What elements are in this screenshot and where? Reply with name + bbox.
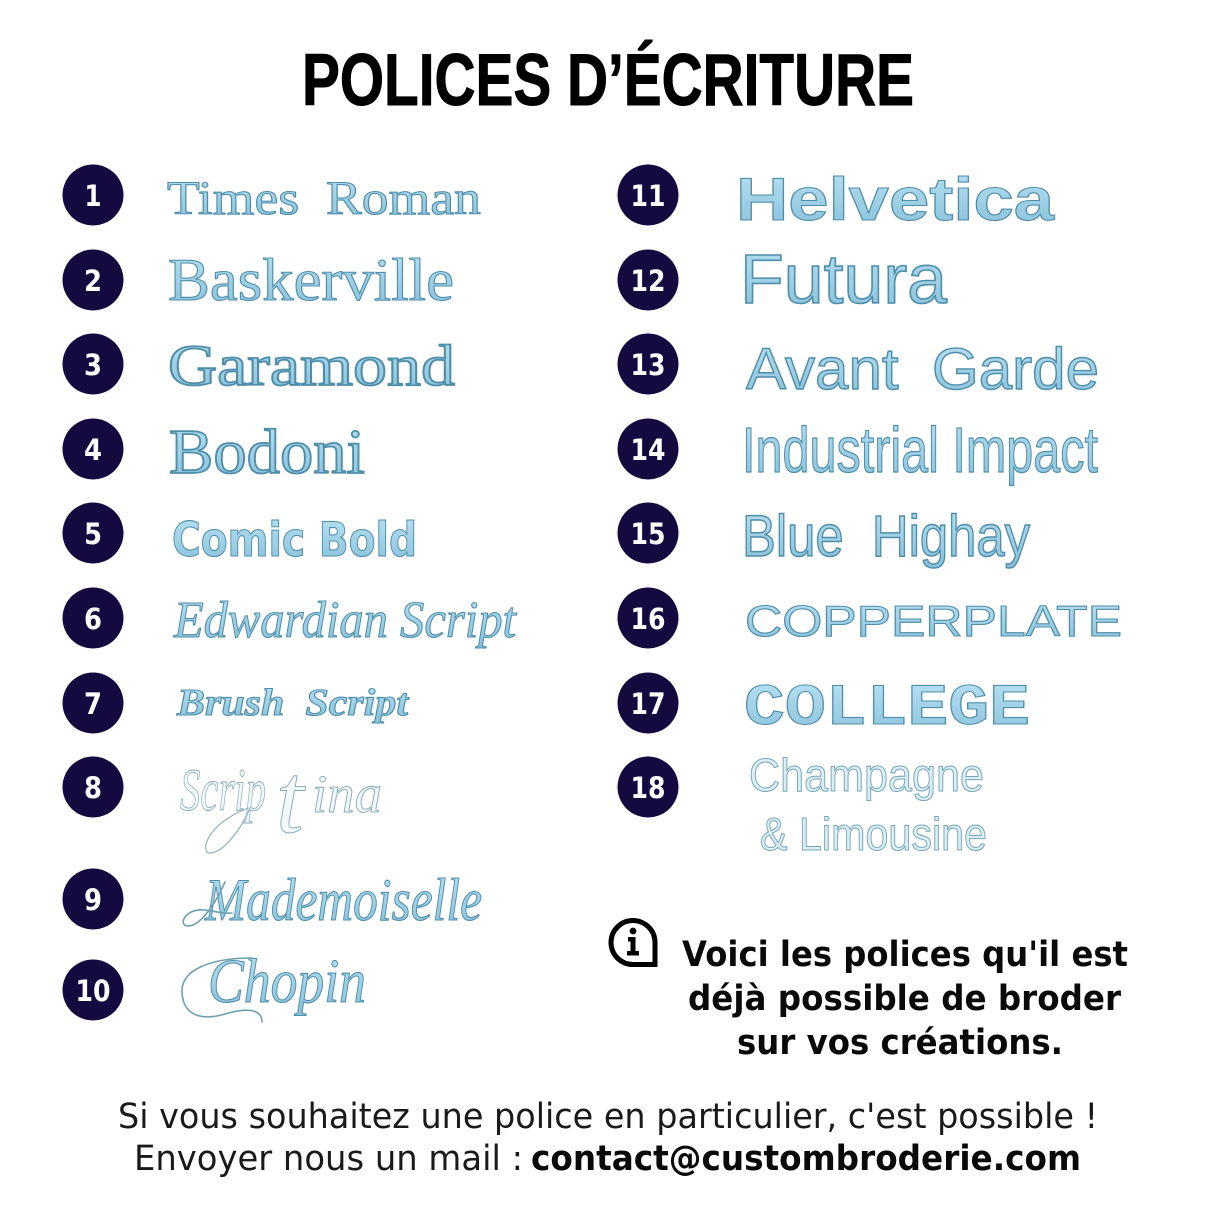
font 5: Comic Bold [62,502,417,568]
font 9: Mademoiselle: Mademoiselle [204,867,482,933]
font 9: Mademoiselle: 9 [84,883,102,917]
font 18: Champagne & Limousine [618,749,987,860]
font 4: Bodoni: 4 [84,433,102,467]
font 2: Baskerville [62,247,454,313]
font 7: Brush Script: Brush Script [176,682,410,724]
font 11: Helvetica [618,164,1055,233]
font 12: Futura [618,240,947,318]
font 17: College [618,672,1030,742]
footer text [118,1097,1098,1179]
font 2: Baskerville: 2 [84,264,102,298]
font 6: Edwardian Script: Edwardian Script [173,592,517,649]
font 8: Scriptina: Scrip [180,757,266,823]
font 3: Garamond: Garamond [168,333,455,398]
font 2: Baskerville: Baskerville [168,247,454,313]
font 12: Futura: 12 [630,264,666,298]
callout text: sur vos créations. [737,1023,1063,1063]
font 10: Chopin [62,948,366,1022]
font 6: Edwardian Script: 6 [84,602,102,636]
footer text: Envoyer nous un mail : [134,1139,523,1179]
font 16: Copperplate: COPPERPLATE [745,597,1122,646]
font 1: Times Roman: 1 [84,179,102,213]
font 15: Blue Highay: 15 [630,517,666,551]
font 9: Mademoiselle [62,867,482,933]
font 1: Times Roman [62,164,481,226]
font 13: Avant Garde [618,334,1099,402]
panel: right font list [618,164,1122,860]
font 10: Chopin: 10 [76,974,110,1008]
font 17: College: COLLEGE [744,677,1030,742]
font 11: Helvetica: Helvetica [736,166,1055,233]
footer text: Si vous souhaitez une police en particulier, c'est possible ! [118,1097,1098,1137]
font 12: Futura: Futura [740,240,947,318]
font 8: Scriptina: 8 [84,771,102,805]
font 16: Copperplate [618,588,1122,648]
font 3: Garamond: 3 [84,348,102,382]
font 7: Brush Script: 7 [84,687,102,721]
font 4: Bodoni: Bodoni [169,417,365,487]
font 1: Times Roman: Times Roman [167,172,481,225]
font 14: Industrial Impact [618,414,1098,486]
font 4: Bodoni [62,417,365,487]
font 18: Champagne & Limousine: Champagne [749,749,984,801]
panel: left font list [62,164,517,1022]
callout text: Voici les polices qu'il est [682,935,1128,975]
font 18: Champagne & Limousine: 18 [630,771,666,805]
font 17: College: 17 [630,687,666,721]
callout text [682,935,1128,1063]
font 16: Copperplate: 16 [630,602,666,636]
font 6: Edwardian Script [62,588,517,649]
font 8: Scriptina: t [276,743,306,854]
font 15: Blue Highay [618,502,1030,569]
font 13: Avant Garde: Avant Garde [746,337,1099,402]
font 7: Brush Script [62,672,410,734]
font 5: Comic Bold: Comic Bold [172,513,417,568]
font 18: Champagne & Limousine: & Limousine [760,808,987,860]
font 14: Industrial Impact: Industrial Impact [742,414,1098,486]
footer text: contact@custombroderie.com [531,1139,1081,1179]
font 11: Helvetica: 11 [630,179,666,213]
font 14: Industrial Impact: 14 [630,433,666,467]
icon: info speech bubble [611,921,655,964]
title: POLICES D’ÉCRITURE [302,40,914,121]
font 8: Scriptina: ina [312,764,382,824]
font 3: Garamond [62,333,455,398]
font 13: Avant Garde: 13 [630,348,666,382]
font 10: Chopin: Chopin [208,948,366,1016]
font 8: Scriptina [62,743,382,854]
font 15: Blue Highay: Blue Highay [742,504,1030,569]
font 5: Comic Bold: 5 [84,517,102,551]
callout text: déjà possible de broder [688,979,1122,1019]
